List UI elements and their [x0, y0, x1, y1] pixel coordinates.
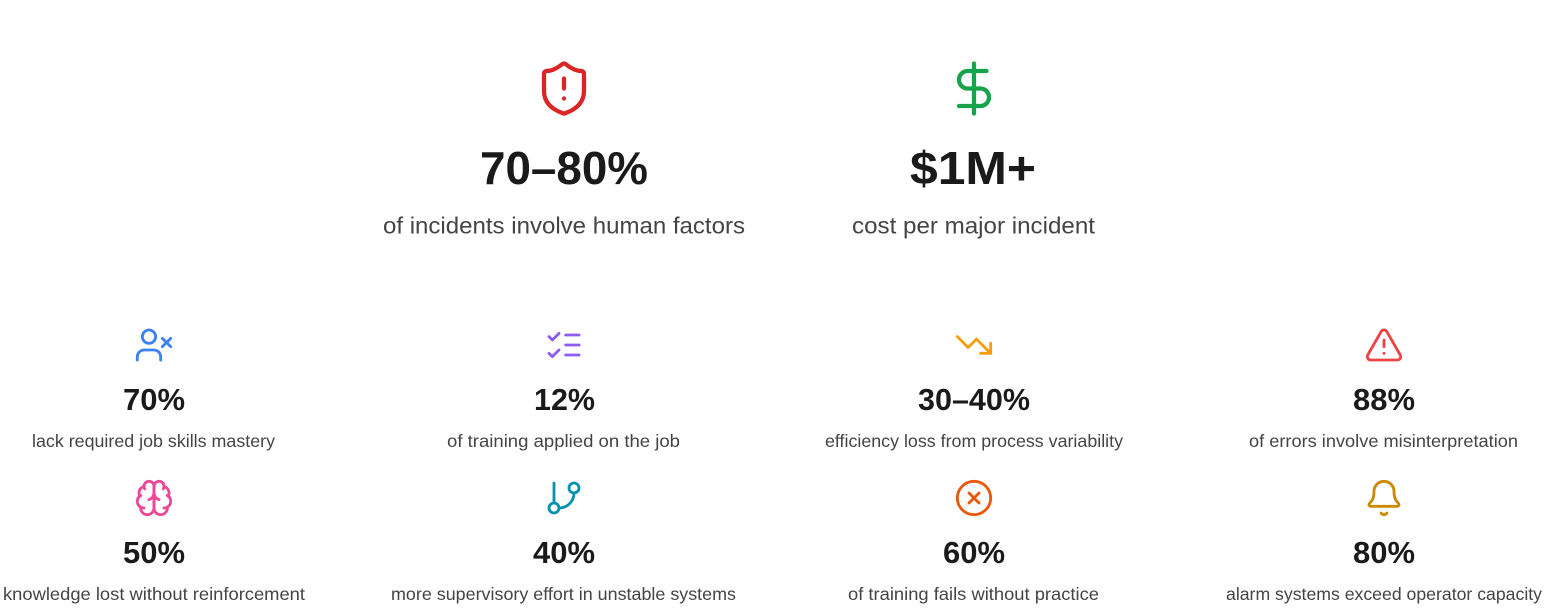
- label: of training fails without practice: [848, 584, 1099, 604]
- stat: job skills mastery: [32, 330, 275, 451]
- stat: training failure: [848, 481, 1099, 604]
- label: of training applied on the job: [447, 431, 680, 451]
- stat: efficiency loss: [825, 337, 1123, 451]
- icon: list checks: [549, 333, 579, 357]
- icon: trending down: [957, 337, 991, 353]
- headline label: cost per major incident: [852, 212, 1096, 238]
- icon: warning triangle: [1367, 330, 1401, 360]
- panel: incident cost headline stat: [852, 64, 1096, 238]
- value: 60%: 60%: [943, 535, 1005, 570]
- icon: bell: [1369, 481, 1399, 515]
- icon: dollar sign: [959, 64, 989, 114]
- label: lack required job skills mastery: [32, 431, 275, 451]
- icon: user x: [137, 330, 171, 360]
- value: 70%: 70%: [123, 382, 185, 417]
- value: 30–40%: 30–40%: [918, 382, 1030, 417]
- headline value: $1M+: $1M+: [910, 142, 1036, 194]
- value: 88%: 88%: [1353, 382, 1415, 417]
- stat: supervisory effort: [391, 483, 736, 604]
- value: 40%: 40%: [533, 535, 595, 570]
- stat: misinterpretation errors: [1249, 330, 1518, 451]
- icon: shield alert: [544, 63, 584, 114]
- headline label: of incidents involve human factors: [383, 212, 745, 238]
- icon: brain: [137, 481, 171, 515]
- icon: git branch: [549, 483, 579, 513]
- label: knowledge lost without reinforcement: [3, 584, 305, 604]
- label: efficiency loss from process variability: [825, 431, 1123, 451]
- value: 80%: 80%: [1353, 535, 1415, 570]
- label: more supervisory effort in unstable systems: [391, 584, 736, 604]
- headline value: 70–80%: 70–80%: [480, 142, 648, 194]
- stat: knowledge lost: [3, 481, 305, 604]
- stat: training applied: [447, 333, 680, 451]
- label: of errors involve misinterpretation: [1249, 431, 1518, 451]
- value: 12%: 12%: [534, 382, 595, 417]
- stat: alarm overload: [1226, 481, 1542, 604]
- value: 50%: 50%: [123, 535, 185, 570]
- panel: human factors headline stat: [383, 63, 745, 239]
- icon: circle x: [957, 481, 991, 515]
- label: alarm systems exceed operator capacity: [1226, 584, 1542, 604]
